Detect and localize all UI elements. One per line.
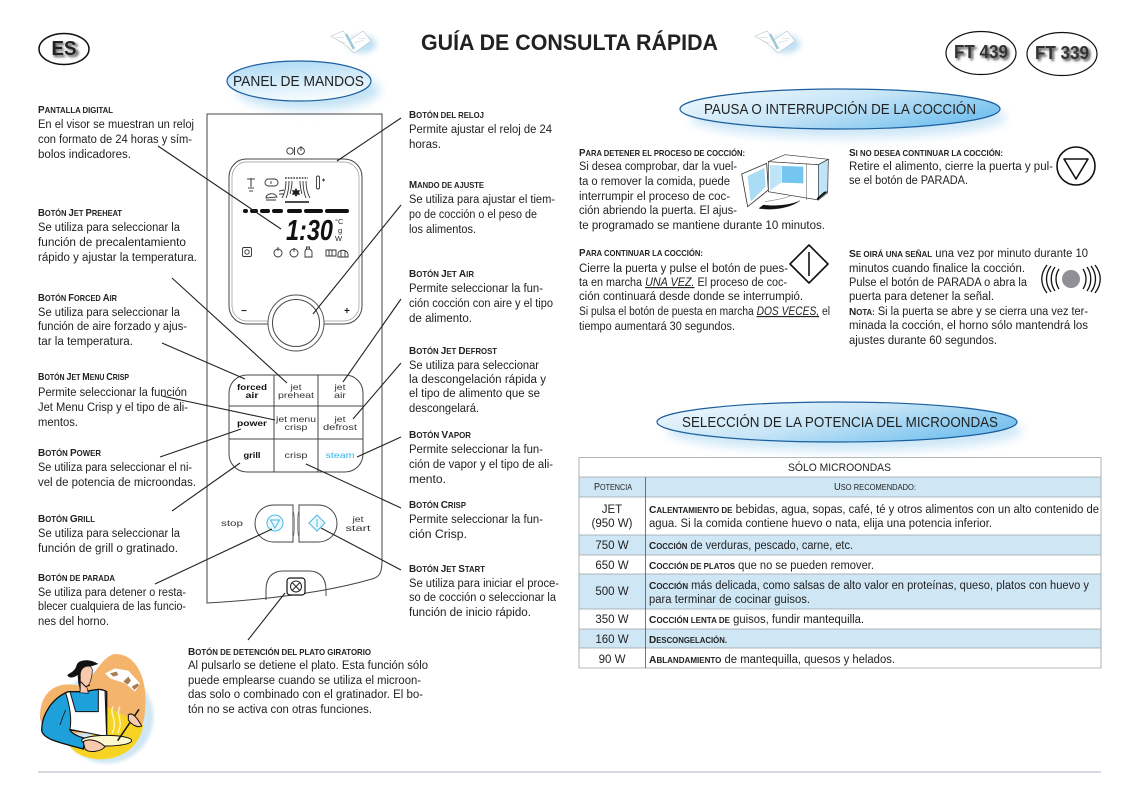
text: boton jet preheat: Se utiliza para seleccionar la: [38, 222, 181, 234]
units: [335, 217, 344, 243]
text: se oira una senal: NOTA: Si la puerta se abre y se cierra una vez ter-: [849, 306, 1088, 318]
heading: seleccion de la potencia: [657, 402, 1023, 451]
text: boton vapor: ción de vapor y el tipo de ali-: [409, 459, 553, 471]
display frame: [229, 159, 362, 324]
units: W: [335, 234, 343, 243]
adjustment knob: [268, 295, 324, 351]
text: para detener: Si desea comprobar, dar la vuel-: [579, 161, 737, 173]
heading: panel de mandos: [227, 61, 380, 110]
text: para continuar: ta en marcha UNA VEZ. El proceso de coc-: [579, 277, 787, 289]
text: boton grill: función de grill o gratinado.: [38, 543, 178, 555]
text: mando de ajuste: los alimentos.: [409, 224, 476, 236]
text: boton grill: [38, 513, 181, 555]
text: mando de ajuste: po de cocción o el peso de: [409, 209, 537, 221]
function button grid: jet: [289, 382, 302, 392]
text: pantalla digital: En el visor se muestran un reloj: [38, 119, 194, 131]
table power values: (950 W): [592, 518, 633, 530]
minus and plus: −: [241, 306, 247, 317]
display symbols: [247, 176, 325, 202]
text: boton forced air: Se utiliza para seleccionar la: [38, 307, 181, 319]
text: boton power: [38, 447, 196, 489]
stop and start buttons: start: [346, 523, 371, 533]
heading: pausa o interrupcion: PAUSA O INTERRUPCIÓN DE LA COCCIÓN: [704, 101, 976, 118]
control panel diagram: [207, 114, 382, 603]
function button grid: jet: [333, 382, 346, 392]
table power values: JET: [602, 504, 622, 516]
text: boton forced air: [38, 292, 187, 348]
table power values: 160 W: [595, 634, 629, 646]
table usage text: COCCIÓN más delicada, como salsas de alto valor en proteínas, queso, platos con huevo y: [649, 580, 1089, 592]
text: boton crisp: ción Crisp.: [409, 529, 467, 541]
table usage text: CALENTAMIENTO DE bebidas, agua, sopas, café, té y otros alimentos con un alto contenido de: [649, 504, 1099, 516]
text: boton vapor: BOTÓN VAPOR: [409, 429, 471, 441]
model badge FT 439: [946, 32, 1016, 74]
turntable stop button: [266, 571, 326, 600]
table usage text: [649, 504, 1099, 666]
model badge FT 339: FT 339: [1037, 45, 1091, 65]
text: boton jet start: [409, 563, 559, 619]
text: boton jet preheat: [38, 207, 197, 264]
table header: SÓLO MICROONDAS: [788, 461, 891, 474]
minus and plus: [241, 306, 350, 317]
power table: [579, 458, 1101, 668]
stop and start buttons: stop: [221, 518, 243, 528]
text: para detener: ción abriendo la puerta. El ajus-: [579, 205, 737, 217]
table usage text: COCCIÓN LENTA DE guisos, fundir mantequilla.: [649, 614, 864, 626]
text: boton vapor: mento.: [409, 474, 446, 486]
function button grid: crisp: [284, 422, 308, 432]
text: boton jet menu crisp: BOTÓN JET MENU CRISP: [38, 371, 129, 383]
function button grid: jet: [333, 414, 346, 424]
model badge FT 339: FT 339: [1035, 43, 1089, 63]
text: boton vapor: [409, 429, 553, 486]
table usage text: DESCONGELACIÓN.: [649, 634, 727, 646]
model badge FT 339: [1027, 32, 1097, 76]
text: boton jet air: BOTÓN JET AIR: [409, 268, 474, 280]
text: boton jet menu crisp: Jet Menu Crisp y el tipo de ali-: [38, 402, 188, 414]
text: boton jet start: so de cocción o seleccionar la: [409, 592, 557, 604]
table header: [594, 461, 916, 493]
table usage text: COCCIÓN DE PLATOS que no se pueden remover.: [649, 560, 874, 572]
text: boton del reloj: Permite ajustar el reloj de 24: [409, 124, 553, 136]
heading: pausa o interrupcion: [680, 89, 1006, 138]
icon: book right: [755, 31, 800, 53]
function button grid: jet menu: [275, 414, 316, 424]
text: boton jet menu crisp: Permite seleccionar la función: [38, 387, 187, 399]
text: boton de detencion del plato giratorio: [188, 646, 428, 716]
text: si no desea continuar: se el botón de PARADA.: [849, 175, 968, 187]
text: pantalla digital: bolos indicadores.: [38, 149, 131, 161]
leader lines: [155, 118, 401, 640]
text: boton crisp: [409, 499, 543, 541]
text: boton jet preheat: rápido y ajustar la temperatura.: [38, 252, 197, 264]
text: boton de detencion del plato giratorio: puede emplearse cuando se utiliza el microon-: [188, 675, 421, 687]
table usage text: COCCIÓN de verduras, pescado, carne, etc.: [649, 540, 853, 552]
text: boton forced air: BOTÓN FORCED AIR: [38, 292, 117, 304]
text: para continuar: Cierre la puerta y pulse el botón de pues-: [579, 263, 788, 275]
text: boton jet defrost: Se utiliza para seleccionar: [409, 360, 539, 372]
text: boton power: vel de potencia de microondas.: [38, 477, 196, 489]
text: boton jet air: Permite seleccionar la fun-: [409, 283, 543, 295]
text: boton crisp: Permite seleccionar la fun-: [409, 514, 543, 526]
text: boton de parada: blecer cualquiera de las funcio-: [38, 601, 186, 613]
power level bar: [245, 209, 347, 213]
text: si no desea continuar: [849, 147, 1053, 187]
text: boton jet defrost: la descongelación rápida y: [409, 374, 546, 386]
icon: sound signal: [1042, 265, 1100, 293]
heading: panel de mandos: PANEL DE MANDOS: [233, 74, 364, 90]
text: boton jet defrost: el tipo de alimento que se: [409, 388, 540, 400]
function button grid: steam: [326, 450, 354, 460]
text: mando de ajuste: Se utiliza para ajustar el tiem-: [409, 194, 555, 206]
text: pantalla digital: [38, 104, 194, 161]
table usage text: agua. Si la comida contiene huevo o nata, elija una potencia inferior.: [649, 518, 992, 530]
units: g: [338, 226, 342, 235]
table power values: 90 W: [599, 654, 626, 666]
text: se oira una senal: SE OIRÁ UNA SEÑAL una vez por minuto durante 10: [849, 248, 1088, 260]
table power values: 500 W: [595, 586, 629, 598]
text: se oira una senal: minada la cocción, el horno sólo mantendrá los: [849, 320, 1088, 332]
text: para detener: ta o remover la comida, puede: [579, 176, 730, 188]
text: boton grill: Se utiliza para seleccionar la: [38, 528, 181, 540]
text: mando de ajuste: MANDO DE AJUSTE: [409, 179, 484, 191]
text: para continuar: ción continuará desde donde se interrumpió.: [579, 291, 803, 303]
text: boton jet air: de alimento.: [409, 313, 472, 325]
title: GUÍA DE CONSULTA RÁPIDA: [421, 30, 718, 55]
lower display symbols: [242, 247, 348, 257]
table power values: 350 W: [595, 614, 629, 626]
text: boton jet menu crisp: mentos.: [38, 417, 78, 429]
text: boton jet air: [409, 268, 553, 325]
text: boton de detencion del plato giratorio: BOTÓN DE DETENCIÓN DEL PLATO GIRATORIO: [188, 646, 372, 658]
stop and start buttons: [221, 505, 371, 542]
function button grid: air: [246, 390, 259, 400]
text: pantalla digital: con formato de 24 horas y sím-: [38, 134, 192, 146]
function button grid: grill: [244, 450, 260, 460]
clock icons: [287, 146, 304, 155]
table power values: 750 W: [595, 540, 629, 552]
text: boton de detencion del plato giratorio: tón no se activa con otras funciones.: [188, 704, 372, 716]
text: para continuar: PARA CONTINUAR LA COCCIÓN:: [579, 247, 703, 259]
text: si no desea continuar: SI NO DESEA CONTINUAR LA COCCIÓN:: [849, 147, 1003, 159]
text: boton jet defrost: [409, 345, 546, 415]
text: boton jet start: función de inicio rápido.: [409, 607, 531, 619]
text: boton jet air: ción cocción con aire y el tipo: [409, 298, 553, 310]
text: boton de parada: Se utiliza para detener o resta-: [38, 587, 186, 599]
text: boton forced air: función de aire forzado y ajus-: [38, 321, 187, 333]
text: para detener: PARA DETENER EL PROCESO DE COCCIÓN:: [579, 147, 745, 159]
text: boton de parada: BOTÓN DE PARADA: [38, 572, 115, 584]
function button grid: forced: [237, 382, 267, 392]
text: se oira una senal: minutos cuando finalice la cocción.: [849, 263, 1025, 275]
function button grid: defrost: [323, 422, 358, 432]
heading: seleccion de la potencia: SELECCIÓN DE LA POTENCIA DEL MICROONDAS: [682, 414, 998, 431]
digital time readout: 1:30: [286, 215, 333, 247]
function button grid: preheat: [278, 390, 315, 400]
bottom rule: [38, 771, 1101, 773]
table power values: [592, 504, 633, 666]
text: boton de detencion del plato giratorio: Al pulsarlo se detiene el plato. Esta función sólo: [188, 660, 428, 672]
model badge FT 439: FT 439: [956, 44, 1010, 64]
text: para detener: te programado se mantiene durante 10 minutos.: [579, 220, 825, 232]
language badge ES: ES: [52, 38, 76, 60]
text: boton vapor: Permite seleccionar la fun-: [409, 444, 543, 456]
text: boton jet menu crisp: [38, 371, 188, 429]
illustration: chef: [40, 654, 153, 763]
function button grid: crisp: [284, 450, 308, 460]
text: se oira una senal: Pulse el botón de PARADA o abra la: [849, 277, 1028, 289]
table usage text: ABLANDAMIENTO de mantequilla, quesos y helados.: [649, 654, 895, 666]
text: boton crisp: BOTÓN CRISP: [409, 499, 466, 511]
text: boton forced air: tar la temperatura.: [38, 336, 133, 348]
function button grid: air: [334, 390, 346, 400]
text: boton jet start: BOTÓN JET START: [409, 563, 485, 575]
text: boton de detencion del plato giratorio: das solo o combinado con el gratinador. El bo-: [188, 689, 423, 701]
icon: start diamond: [790, 245, 828, 283]
text: para detener: interrumpir el proceso de coc-: [579, 191, 730, 203]
text: boton jet start: Se utiliza para iniciar el proce-: [409, 578, 559, 590]
table power values: 650 W: [595, 560, 629, 572]
text: se oira una senal: puerta para detener la señal.: [849, 291, 994, 303]
text: boton de parada: nes del horno.: [38, 616, 109, 628]
text: boton power: Se utiliza para seleccionar el ni-: [38, 462, 192, 474]
text: boton jet defrost: BOTÓN JET DEFROST: [409, 345, 497, 357]
icon: stop circle: [1057, 147, 1095, 185]
table header: USO RECOMENDADO:: [834, 482, 916, 493]
units: °C: [335, 217, 344, 226]
text: se oira una senal: ajustes durante 60 segundos.: [849, 335, 997, 347]
text: boton de parada: [38, 572, 186, 628]
icon: book left: [331, 31, 376, 53]
text: boton del reloj: horas.: [409, 139, 441, 151]
text: boton power: BOTÓN POWER: [38, 447, 101, 459]
function button grid: power: [237, 418, 268, 428]
text: para continuar: tiempo aumentará 30 segundos.: [579, 321, 735, 333]
text: boton jet preheat: función de precalentamiento: [38, 237, 186, 249]
text: mando de ajuste: [409, 179, 555, 236]
text: si no desea continuar: Retire el alimento, cierre la puerta y pul-: [849, 161, 1053, 173]
function button grid: [229, 375, 363, 472]
text: boton jet preheat: BOTÓN JET PREHEAT: [38, 207, 122, 219]
text: boton del reloj: [409, 109, 553, 151]
text: boton jet defrost: descongelará.: [409, 403, 479, 415]
text: boton grill: BOTÓN GRILL: [38, 513, 95, 525]
text: se oira una senal: [849, 248, 1088, 347]
icon: open microwave: [742, 155, 828, 209]
minus and plus: +: [344, 306, 350, 317]
stop and start buttons: jet: [351, 514, 364, 524]
text: boton del reloj: BOTÓN DEL RELOJ: [409, 109, 484, 121]
text: para detener: [579, 147, 825, 232]
table header: POTENCIA: [594, 482, 633, 493]
language badge ES: ES: [53, 40, 79, 62]
table usage text: para terminar de cocinar guisos.: [649, 594, 810, 606]
language badge ES: [39, 34, 89, 64]
text: para continuar: [579, 247, 830, 333]
model badge FT 439: FT 439: [954, 42, 1008, 62]
text: para continuar: Si pulsa el botón de puesta en marcha DOS VECES, el: [579, 306, 830, 318]
text: pantalla digital: PANTALLA DIGITAL: [38, 104, 113, 116]
